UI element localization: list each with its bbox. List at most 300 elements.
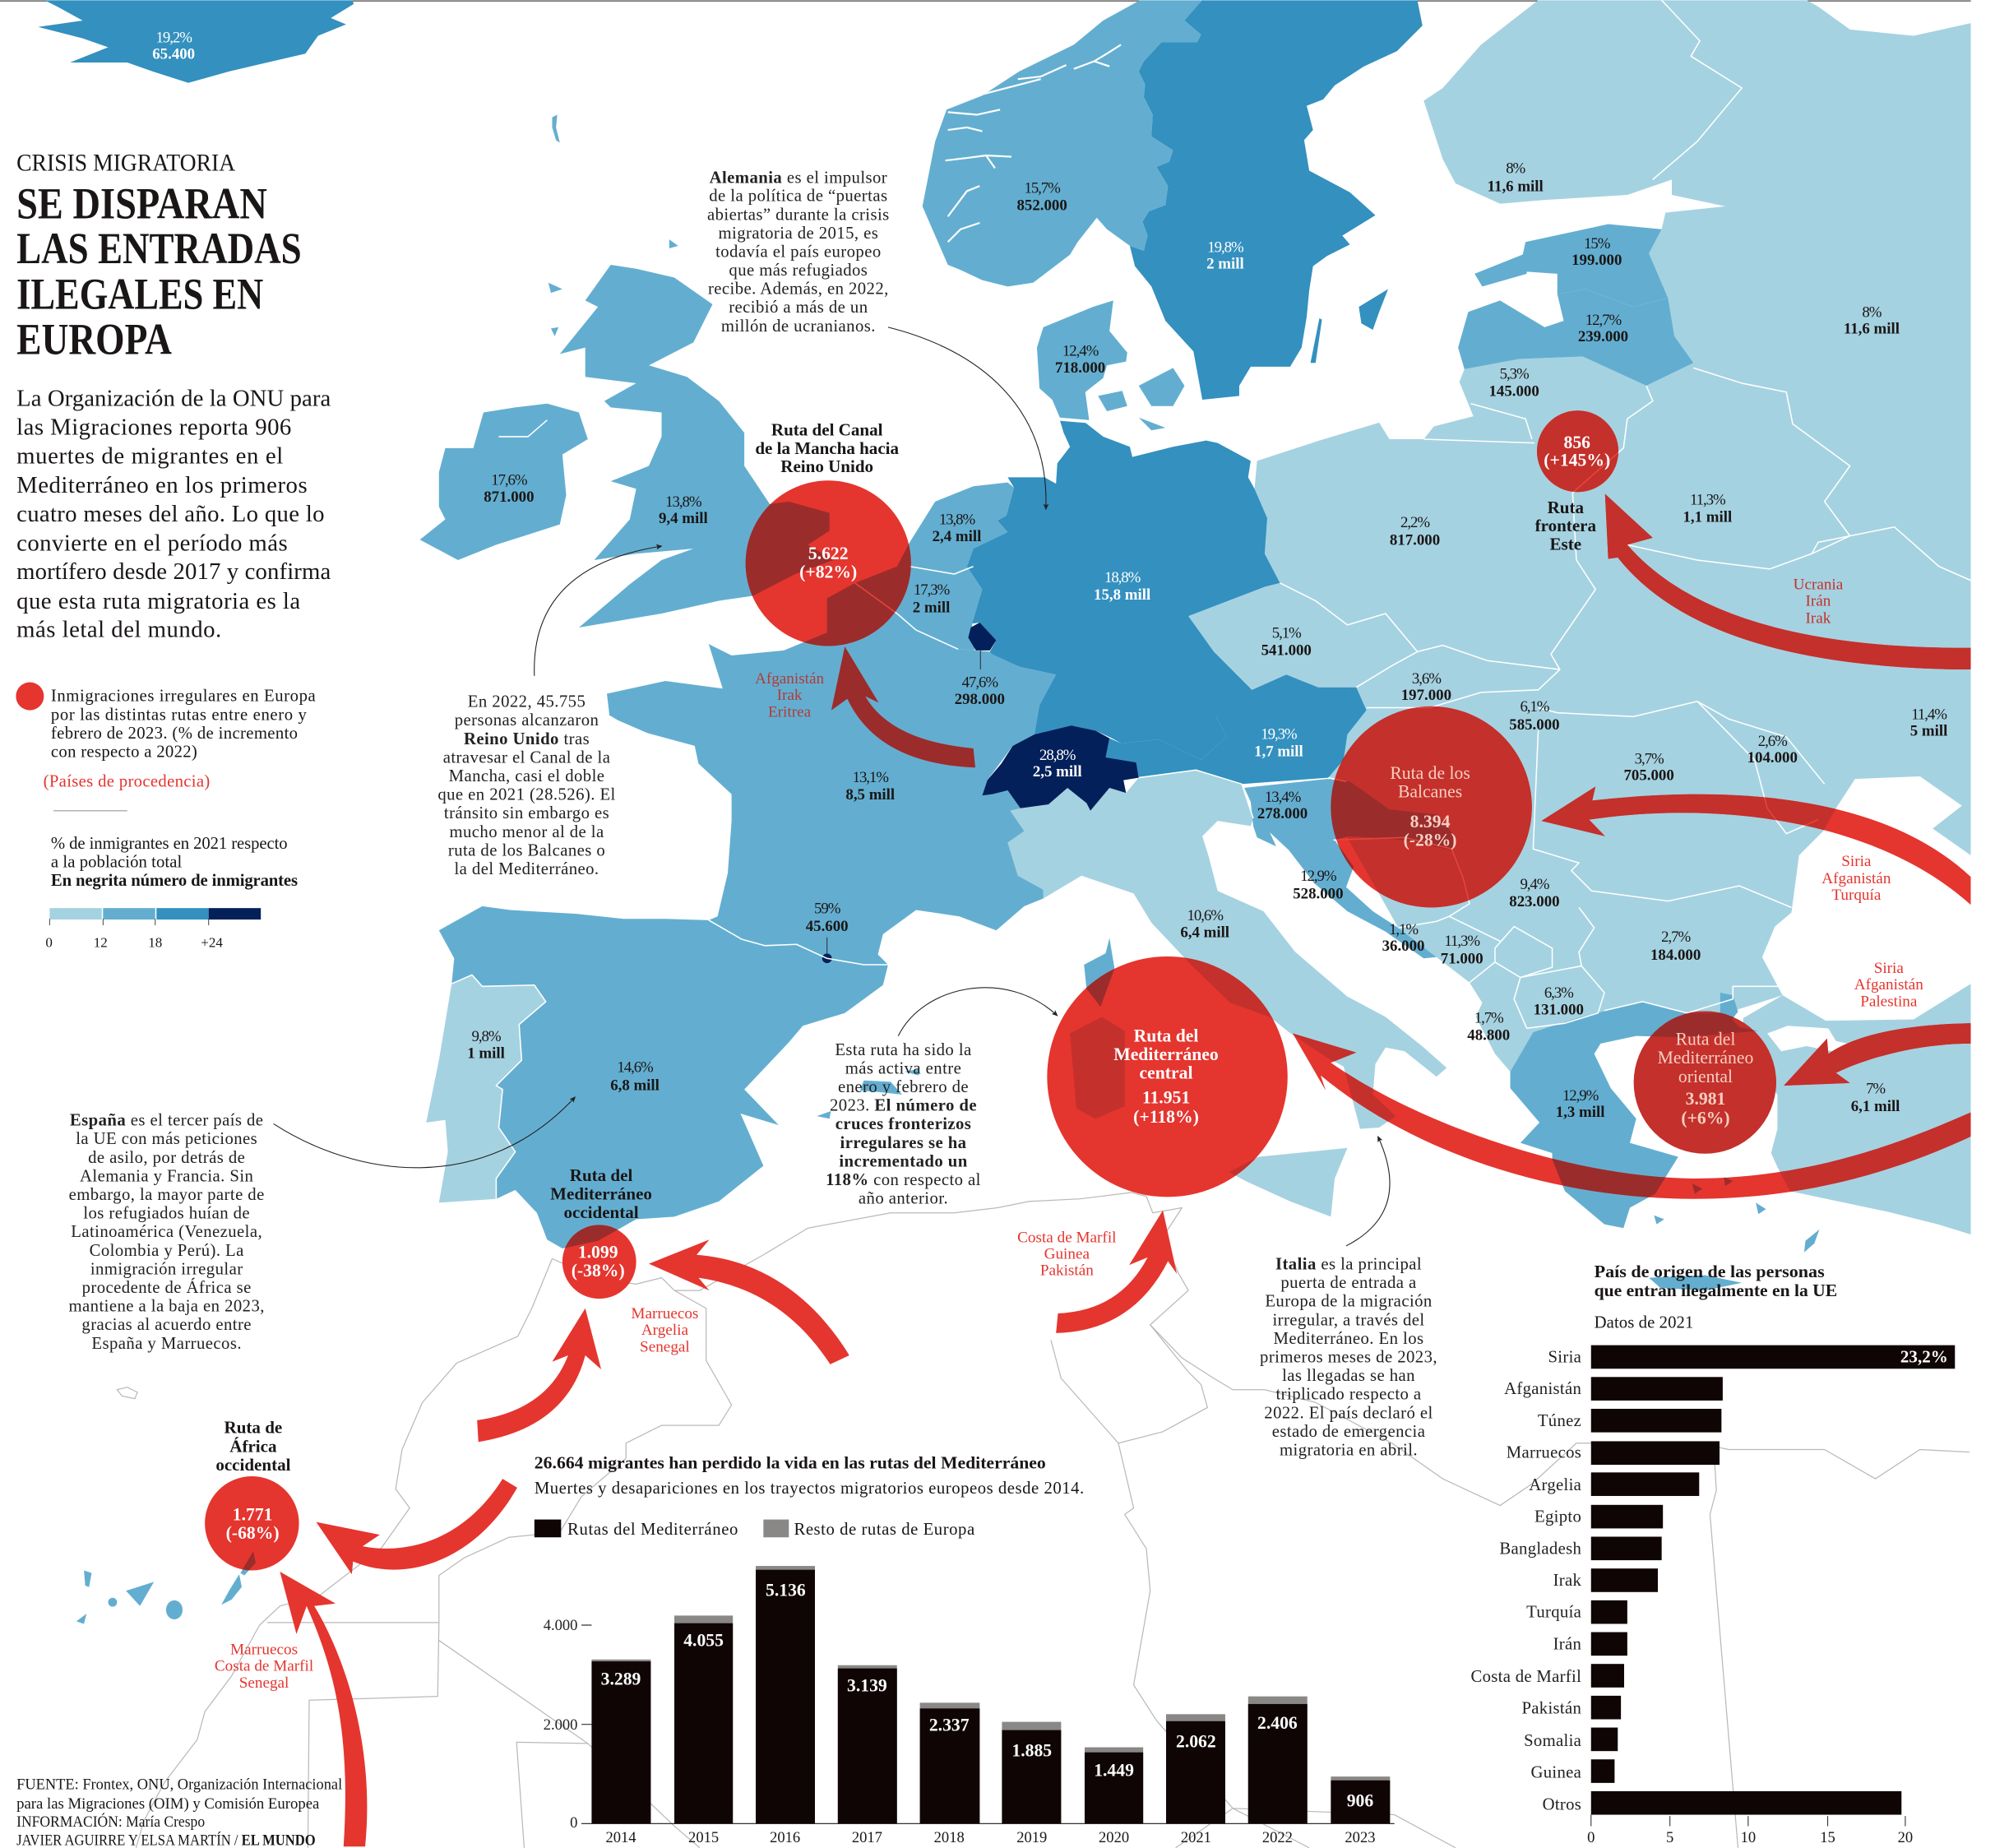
- label: Croatia: 12,9%: [1300, 868, 1337, 885]
- text block: Alemania: que más refugiados: [729, 262, 868, 280]
- bar 2016: [756, 1566, 815, 1823]
- text block: España: Latinoamérica (Venezuela,: [71, 1223, 262, 1241]
- text block: Reino Unido: atravesar el Canal de la: [443, 748, 610, 767]
- route: Africa occidental: Ruta de: [224, 1417, 282, 1437]
- bar 2014: 3.289: [601, 1670, 641, 1689]
- bar 2021: [1166, 1714, 1225, 1823]
- label: Turkey: 7%: [1866, 1080, 1886, 1097]
- label: Germany: 15,8 mill: [1094, 586, 1150, 604]
- label: Czech Republic: 541.000: [1261, 641, 1312, 659]
- label: Denmark: 12,4%: [1062, 343, 1099, 360]
- text block: España: Colombia y Perú). La: [90, 1242, 244, 1260]
- chart legend: Rutas del Mediterráneo: [567, 1521, 738, 1539]
- origins: Africa: Senegal: [239, 1674, 289, 1692]
- annotation curves: [274, 327, 1390, 1246]
- legend: colour scale: 18: [148, 934, 162, 950]
- label: Switzerland: 28,8%: [1039, 747, 1076, 764]
- chart: deaths by year: [535, 1453, 1395, 1846]
- figure: frontera Este: (+145%): [1544, 451, 1610, 470]
- label: Slovenia: 278.000: [1257, 805, 1308, 822]
- label: Hungary: 585.000: [1509, 716, 1560, 734]
- intro paragraph: Mediterráneo en los primeros: [16, 472, 308, 498]
- label: Italy: 10,6%: [1187, 907, 1224, 924]
- figure: Canal: 5.622: [808, 544, 849, 563]
- horizontal bars: [1591, 1345, 1955, 1815]
- arrow: to Africa occidental from south: [280, 1572, 367, 1846]
- label: Poland: 2,2%: [1400, 514, 1430, 531]
- islands: Canaries: [76, 1570, 242, 1623]
- text block: España: mantiene a la baja en 2023,: [69, 1298, 265, 1316]
- top rule: [0, 0, 1971, 2]
- text block: Italia: las llegadas se han: [1282, 1367, 1415, 1385]
- route: Mediterraneo central: central: [1140, 1063, 1192, 1082]
- text block: Italia: puerta de entrada a: [1280, 1274, 1417, 1292]
- label: Belgium: 17,3%: [914, 581, 951, 599]
- label: Austria: 1,7 mill: [1254, 743, 1303, 760]
- country: Spain: [439, 906, 888, 1248]
- legend: [16, 683, 316, 950]
- legend: circle description: febrero de 2023. (% de incremento: [51, 725, 298, 743]
- label: Latvia: 239.000: [1578, 328, 1628, 345]
- country: Denmark: [1037, 300, 1184, 430]
- circle: Africa occidental: [205, 1476, 299, 1570]
- circle: Mediterraneo occidental: [562, 1225, 636, 1299]
- text block: Reino Unido: personas alcanzaron: [455, 711, 599, 729]
- x axis: 10: [1741, 1829, 1756, 1846]
- origins: Balcanes: Afganistán: [1821, 870, 1891, 887]
- text block: ruta central: 118% con respecto al: [826, 1171, 981, 1189]
- label: Luxembourg: 47,6%: [962, 674, 998, 692]
- text block: España: [69, 1112, 265, 1353]
- Sea of Marmara: [1767, 1026, 1847, 1051]
- label: Finland: 11,6 mill: [1488, 178, 1544, 195]
- label: Bulgaria: 184.000: [1650, 947, 1701, 964]
- label: Romania: 3,7%: [1635, 751, 1664, 768]
- chart legend: [535, 1520, 974, 1539]
- circle: Mediterraneo oriental: [1634, 1011, 1776, 1154]
- country: Switzerland: [982, 725, 1139, 811]
- origins: oriental: Afganistán: [1854, 976, 1923, 993]
- route: Balcanes: Ruta de los: [1390, 763, 1470, 783]
- legend: colour scale description: [51, 835, 298, 890]
- label: Bosnia: 1,1%: [1389, 921, 1419, 938]
- bar 2018: 2.337: [929, 1715, 970, 1735]
- leader lines: Luxembourg and Andorra: [827, 651, 980, 953]
- country: Turkey: [1743, 984, 1971, 1234]
- text block: España: procedente de África se: [82, 1278, 252, 1297]
- text block: Reino Unido: ruta de los Balcanes o: [448, 841, 605, 859]
- bar 2017: [838, 1665, 897, 1823]
- arrow: from Tunisia: [1056, 1211, 1177, 1333]
- figure: Africa: (-68%): [226, 1523, 280, 1543]
- route: Africa occidental: [215, 1417, 291, 1475]
- origins: oriental: Palestina: [1860, 993, 1918, 1010]
- label: Ireland: 871.000: [484, 489, 535, 506]
- x axis years: 2017: [852, 1829, 882, 1846]
- text block: Reino Unido: En 2022, 45.755: [468, 693, 586, 711]
- label: Montenegro: 71.000: [1441, 950, 1484, 967]
- Thrace blob: [1720, 993, 1738, 1025]
- label: Moldova: 104.000: [1747, 749, 1798, 767]
- intro paragraph: mortífero desde 2017 y confirma: [16, 558, 331, 585]
- x axis years: 2018: [934, 1829, 965, 1846]
- text block: Reino Unido: mucho menor al de la: [449, 823, 604, 841]
- chart title: País de origen de las personas: [1595, 1262, 1825, 1281]
- country: eastern Europe and Russia: [1188, 0, 1971, 1072]
- bars: [591, 1566, 1390, 1823]
- text block: ruta central: Esta ruta ha sido la: [835, 1041, 972, 1059]
- intro paragraph: [16, 385, 331, 643]
- bar 2023: [1331, 1776, 1390, 1823]
- arrow: from Algeria to occidental: [649, 1239, 849, 1364]
- arrow: from Morocco to occidental: [477, 1308, 601, 1442]
- route: Balcanes: Balcanes: [1398, 782, 1462, 802]
- label: Finland: 8%: [1506, 160, 1526, 178]
- text block: Italia: migratoria en abril.: [1280, 1441, 1418, 1459]
- text block: Italia: [1260, 1256, 1437, 1459]
- country: Germany: [967, 420, 1280, 760]
- text block: Reino Unido: tránsito sin embargo es: [444, 804, 609, 822]
- text block: Alemania: migratoria de 2015, es: [718, 225, 878, 243]
- x axis: 20: [1898, 1829, 1913, 1846]
- route: Balcanes: [1390, 763, 1470, 850]
- figure: Canal: [799, 544, 857, 582]
- origins: occidental: Senegal: [640, 1338, 690, 1355]
- route: Mediterraneo occidental: Mediterráneo: [550, 1183, 652, 1203]
- origins: Africa: Marruecos: [230, 1642, 298, 1659]
- chart legend: Resto de rutas de Europa: [794, 1521, 974, 1539]
- map: countries 12-18%: [76, 0, 1819, 1623]
- map: countries 18-24%: [38, 0, 1423, 784]
- route circles and arrows: [205, 410, 1971, 1846]
- label: Ukraine: 11,4%: [1911, 706, 1947, 723]
- intro paragraph: las Migraciones reporta 906: [16, 414, 291, 440]
- origins: central: [1017, 1229, 1116, 1280]
- text block: Alemania: todavía el país europeo: [715, 243, 882, 262]
- origins: Africa: Costa de Marfil: [215, 1658, 313, 1675]
- origins: Este: Ucrania: [1794, 577, 1844, 594]
- text block: España: de asilo, por detrás de: [88, 1149, 245, 1167]
- legend: circle description: [51, 688, 316, 762]
- country: Sweden: [1130, 0, 1423, 400]
- label: Sweden: 2 mill: [1206, 256, 1244, 273]
- bar 2021: 2.062: [1176, 1732, 1216, 1752]
- label: Czech Republic: 5,1%: [1272, 624, 1302, 641]
- origins: Balcanes: Siria: [1841, 853, 1872, 870]
- intro paragraph: convierte en el período más: [16, 530, 288, 556]
- origins: oriental: Siria: [1874, 960, 1904, 977]
- text block: España: inmigración irregular: [90, 1260, 243, 1278]
- Scottish islands: [549, 114, 678, 336]
- arrow: to frontera Este: [1605, 494, 1971, 669]
- circle: Balcanes: [1331, 706, 1532, 907]
- route: Balcanes: 8.394: [1410, 812, 1451, 831]
- label: Portugal: 9,8%: [472, 1028, 502, 1045]
- label: Switzerland: 2,5 mill: [1033, 763, 1082, 780]
- country names: Somalia: [1524, 1732, 1581, 1750]
- figure: frontera Este: 856: [1564, 433, 1590, 452]
- bar 2014: [591, 1660, 650, 1823]
- text block: España: España y Marruecos.: [91, 1335, 242, 1353]
- legend: colour scale: +24: [201, 934, 223, 950]
- label: Iceland: 65.400: [152, 45, 195, 63]
- x axis years: 2014: [605, 1829, 636, 1846]
- route: Mediterraneo central: Mediterráneo: [1113, 1044, 1219, 1064]
- figure: Canal: (+82%): [799, 563, 857, 582]
- country: Norway: [923, 0, 1204, 286]
- text block: Reino Unido: Reino Unido tras: [464, 730, 590, 748]
- figure: occidental: [572, 1243, 625, 1281]
- label: Slovenia: 13,4%: [1265, 789, 1302, 806]
- label: Netherlands: 2,4 mill: [933, 528, 981, 545]
- legend: circle description: con respecto a 2022): [51, 743, 197, 762]
- bar 2016: 5.136: [766, 1580, 806, 1600]
- figure: occidental: (-38%): [572, 1261, 625, 1281]
- origins: Canal: [755, 670, 825, 720]
- headline: EUROPA: [16, 314, 172, 364]
- origins: occidental: Argelia: [641, 1322, 688, 1339]
- legend: colour scale description: a la población total: [51, 854, 182, 872]
- intro paragraph: cuatro meses del año. Lo que lo: [16, 501, 325, 527]
- x axis: [1587, 1816, 1913, 1846]
- island: Saaremaa: [1474, 253, 1527, 286]
- legend: colour scale: 12: [94, 934, 108, 950]
- origins: Balcanes: Turquía: [1831, 887, 1882, 904]
- text block: España: los refugiados huían de: [83, 1205, 250, 1223]
- x axis years: 2019: [1016, 1829, 1047, 1846]
- bar 2020: 1.449: [1094, 1760, 1134, 1780]
- bar 2019: [1002, 1722, 1061, 1823]
- title block: [16, 151, 331, 643]
- x axis years: 2023: [1345, 1829, 1375, 1846]
- label: Moldova: 2,6%: [1758, 733, 1788, 750]
- text block: ruta central: cruces fronterizos: [835, 1115, 971, 1133]
- country names: Irak: [1553, 1572, 1581, 1590]
- island: Crete and Cyprus: [1649, 1230, 1819, 1290]
- x axis: 5: [1666, 1829, 1673, 1846]
- label: Austria: 19,3%: [1261, 725, 1298, 743]
- route: frontera Este: Este: [1550, 535, 1581, 554]
- figure: frontera Este: [1544, 433, 1610, 470]
- arrow: to Balcanes: [1541, 786, 1971, 905]
- x axis years: [605, 1829, 1375, 1846]
- chart title: 26.664 migrantes han perdido la vida en las rutas del Mediterráneo: [535, 1453, 1046, 1473]
- country: Luxembourg: [968, 623, 996, 651]
- text block: España: gracias al acuerdo entre: [81, 1316, 252, 1334]
- chart title: que entran ilegalmente en la UE: [1595, 1281, 1837, 1300]
- label: Norway: 852.000: [1017, 197, 1067, 215]
- origins: occidental: Marruecos: [631, 1305, 698, 1322]
- country: Estonia: [1519, 225, 1668, 307]
- islands: Gotland and Oland: [1311, 289, 1388, 363]
- origins: Este: [1794, 577, 1844, 628]
- text block: ruta central: irregulares se ha: [840, 1134, 967, 1152]
- label: Lithuania: 5,3%: [1500, 366, 1530, 383]
- country: France: [607, 583, 1056, 965]
- text block: ruta central: [826, 1041, 981, 1208]
- label: Russia: 8%: [1862, 303, 1882, 321]
- bar 2017: 3.139: [847, 1675, 887, 1695]
- text block: Alemania: de la política de “puertas: [709, 188, 887, 206]
- axis line: [1590, 1815, 1592, 1826]
- label: Belgium: 2 mill: [913, 599, 950, 616]
- text block: Italia: triplicado respecto a: [1275, 1386, 1422, 1404]
- country names: Irán: [1553, 1635, 1581, 1653]
- origins: occidental: [631, 1305, 698, 1355]
- source credits: INFORMACIÓN: María Crespo: [16, 1813, 205, 1831]
- legend: red circle: [16, 683, 44, 711]
- label: Montenegro: 11,3%: [1444, 933, 1480, 950]
- legend: origin countries: (Países de procedencia): [44, 772, 210, 790]
- origins: Balcanes: [1821, 853, 1891, 904]
- label: Turkey: 6,1 mill: [1851, 1098, 1900, 1115]
- label: North Macedonia: 131.000: [1534, 1001, 1584, 1018]
- bar 2022: 2.406: [1257, 1713, 1298, 1733]
- label: Albania: 1,7%: [1474, 1009, 1504, 1026]
- text block: Reino Unido: la del Mediterráneo.: [454, 860, 599, 878]
- legend: colour scale: [45, 908, 261, 950]
- y axis: 0: [570, 1814, 577, 1832]
- label: Denmark: 718.000: [1055, 359, 1105, 377]
- intro paragraph: más letal del mundo.: [16, 617, 221, 643]
- text block: Reino Unido: que en 2021 (28.526). El: [437, 786, 616, 804]
- country: Portugal: [426, 975, 546, 1202]
- source credits: FUENTE: Frontex, ONU, Organización Internacional: [16, 1776, 342, 1794]
- label: Estonia: 199.000: [1571, 252, 1622, 269]
- text block: España: España es el tercer país de: [70, 1112, 263, 1130]
- route: frontera Este: frontera: [1535, 516, 1596, 535]
- country names: Bangladesh: [1499, 1540, 1581, 1558]
- label: Spain: 6,8 mill: [610, 1077, 660, 1094]
- value label: 23,2%: [1900, 1347, 1948, 1367]
- country names: [1470, 1349, 1581, 1813]
- label: Albania: 48.800: [1467, 1026, 1510, 1044]
- origins: Este: Irak: [1806, 610, 1831, 628]
- map: countries over 24%: [822, 623, 1139, 963]
- headline: ILEGALES EN: [16, 270, 263, 319]
- country names: Afganistán: [1504, 1380, 1581, 1398]
- text block: España: Alemania y Francia. Sin: [80, 1167, 254, 1185]
- country names: Siria: [1548, 1349, 1581, 1367]
- circle: Mediterraneo central: [1047, 956, 1288, 1197]
- label: Bulgaria: 2,7%: [1661, 929, 1692, 946]
- label: France: 8,5 mill: [845, 786, 895, 804]
- source credits: [16, 1776, 342, 1848]
- label: Belarus: 1,1 mill: [1683, 509, 1732, 526]
- country: Sardinia: [1070, 1017, 1125, 1119]
- route: Balcanes: (-28%): [1404, 830, 1457, 850]
- bar 2023: 906: [1347, 1790, 1373, 1810]
- label: Norway: 15,7%: [1024, 180, 1061, 197]
- kicker: CRISIS MIGRATORIA: [16, 151, 235, 177]
- text block: Italia: primeros meses de 2023,: [1260, 1349, 1437, 1367]
- text block: Reino Unido: [437, 693, 616, 878]
- route: Mediterraneo central: Ruta del: [1134, 1026, 1198, 1046]
- label: Croatia: 528.000: [1293, 886, 1344, 903]
- label: Germany: 18,8%: [1104, 569, 1141, 586]
- country names: Túnez: [1538, 1412, 1581, 1430]
- route: Mediterraneo central: 11.951: [1142, 1088, 1190, 1108]
- text block: Italia: Italia es la principal: [1275, 1256, 1422, 1274]
- route: Mediterraneo occidental: Ruta del: [570, 1165, 632, 1185]
- label: Lithuania: 145.000: [1489, 382, 1539, 400]
- country names: Turquía: [1526, 1604, 1581, 1622]
- chart subtitle: Datos de 2021: [1595, 1314, 1693, 1332]
- text block: Reino Unido: Mancha, casi el doble: [449, 767, 604, 785]
- label: Estonia: 15%: [1584, 235, 1611, 252]
- x axis years: 2021: [1181, 1829, 1211, 1846]
- label: Luxembourg: 298.000: [955, 691, 1005, 708]
- country names: Costa de Marfil: [1470, 1668, 1581, 1686]
- x axis: 15: [1820, 1829, 1835, 1846]
- label: Greece: 12,9%: [1562, 1087, 1599, 1105]
- route: frontera Este: Ruta: [1548, 498, 1585, 517]
- intro paragraph: La Organización de la ONU para: [16, 385, 331, 411]
- label: Greece: 1,3 mill: [1556, 1104, 1604, 1121]
- headline: [16, 178, 302, 364]
- label: Andorra: 59%: [814, 900, 841, 917]
- circle: Canal de la Mancha: [746, 480, 911, 646]
- label: Slovakia: 3,6%: [1412, 670, 1442, 688]
- label: Spain: 14,6%: [617, 1059, 654, 1077]
- text block: ruta central: más activa entre: [845, 1059, 961, 1077]
- text block: Alemania: millón de ucranianos.: [721, 317, 876, 336]
- arrow: to Mediterraneo oriental: [1784, 1023, 1971, 1086]
- headline: LAS ENTRADAS: [16, 224, 302, 273]
- circle: frontera Este: [1537, 410, 1618, 492]
- country: Benelux: [855, 483, 1014, 651]
- arrow: long arc to Mediterraneo central: [1293, 1034, 1971, 1199]
- map: countries under 12%: [426, 0, 1971, 1234]
- route: Mediterraneo occidental: [550, 1165, 652, 1222]
- label: Belarus: 11,3%: [1690, 492, 1726, 509]
- map: North Africa outlines: [117, 1193, 1970, 1848]
- route: frontera Este: [1535, 498, 1596, 554]
- label: Serbia: 9,4%: [1520, 876, 1550, 893]
- origins: central: Costa de Marfil: [1017, 1229, 1116, 1246]
- text block: Alemania: abiertas” durante la crisis: [707, 206, 890, 224]
- chart: origin countries: [1470, 1262, 1955, 1846]
- origins: central: Guinea: [1044, 1245, 1090, 1262]
- country names: Marruecos: [1507, 1444, 1581, 1462]
- label: Ukraine: 5 mill: [1910, 723, 1947, 740]
- label: Ireland: 17,6%: [491, 472, 528, 489]
- chart title: [1595, 1262, 1837, 1300]
- route: Canal de la Mancha: [755, 419, 899, 476]
- label: Andorra: 45.600: [806, 918, 849, 935]
- map: white borders and fjords: [451, 0, 1971, 1199]
- route: Africa occidental: África: [229, 1437, 277, 1457]
- arrow: to Canal: [831, 646, 975, 767]
- text block: Alemania: [707, 169, 890, 336]
- legend: colour scale description: % de inmigrantes en 2021 respecto: [51, 835, 288, 853]
- country: Ireland: [420, 404, 588, 560]
- text block: ruta central: enero y febrero de: [838, 1078, 969, 1096]
- figure: occidental: 1.099: [578, 1243, 618, 1262]
- x axis years: 2020: [1099, 1829, 1129, 1846]
- bar 2015: 4.055: [683, 1631, 724, 1651]
- bar 2022: [1248, 1697, 1308, 1823]
- route: Mediterraneo oriental: [1658, 1029, 1753, 1128]
- label: United Kingdom: 9,4 mill: [659, 510, 708, 527]
- legend: circle description: por las distintas rutas entre enero y: [51, 706, 308, 724]
- country: Sicily: [1229, 1148, 1347, 1216]
- source credits: para las Migraciones (OIM) y Comisión Europea: [16, 1795, 320, 1813]
- text block: Italia: Europa de la migración: [1265, 1293, 1433, 1311]
- country names: Egipto: [1534, 1508, 1581, 1526]
- origins: Canal: Afganistán: [755, 670, 825, 688]
- route: Mediterraneo oriental: 3.981: [1686, 1089, 1725, 1109]
